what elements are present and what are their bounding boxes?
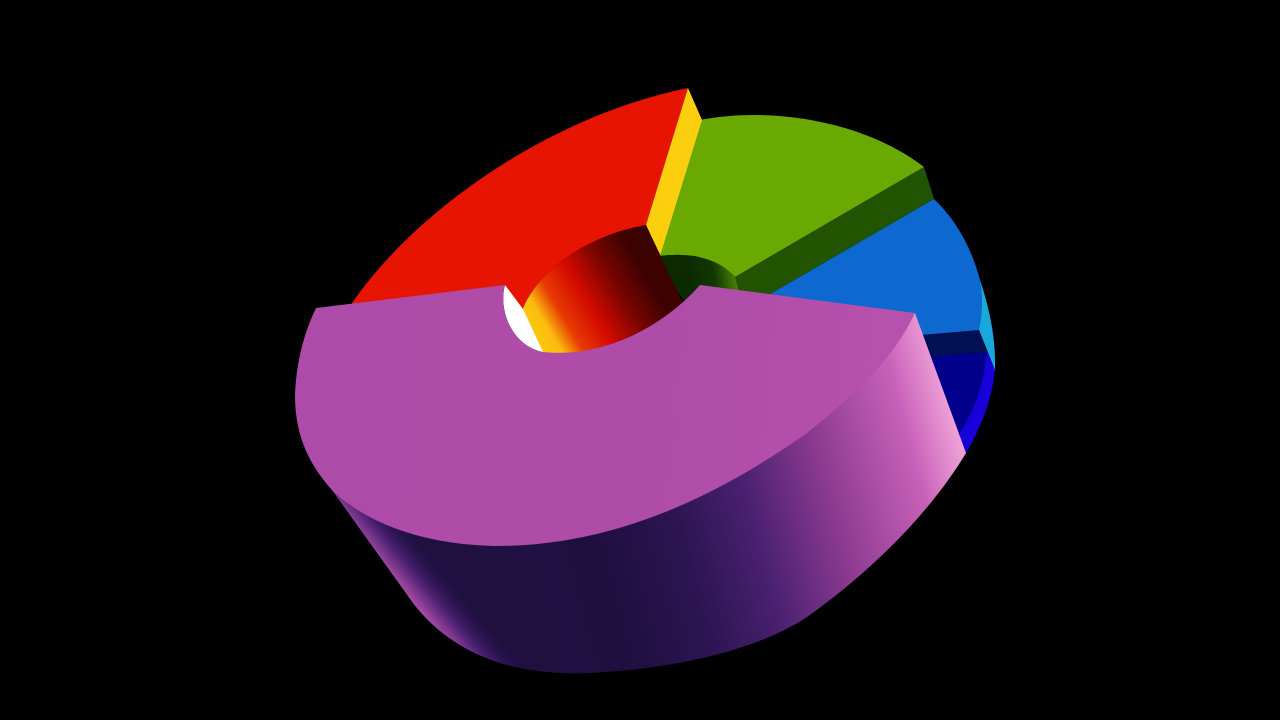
slice: cyan outer wall	[979, 280, 995, 370]
slice: navy cut band	[920, 330, 987, 357]
slice: green top	[660, 115, 924, 277]
large purple slice: top	[295, 285, 915, 546]
slice: bright blue outer wall	[950, 350, 995, 453]
large purple slice: outer wall	[332, 313, 966, 673]
slice: yellow cut face	[646, 88, 702, 256]
donut hole: green inner wall	[660, 255, 740, 310]
donut hole: red inner wall	[523, 225, 684, 362]
slice: dark green cut face	[735, 167, 934, 300]
donut hole: white inner wall	[503, 285, 560, 352]
slice: blue top	[770, 199, 982, 338]
slice: navy lower wall	[925, 350, 987, 445]
slice: red top	[352, 88, 688, 310]
